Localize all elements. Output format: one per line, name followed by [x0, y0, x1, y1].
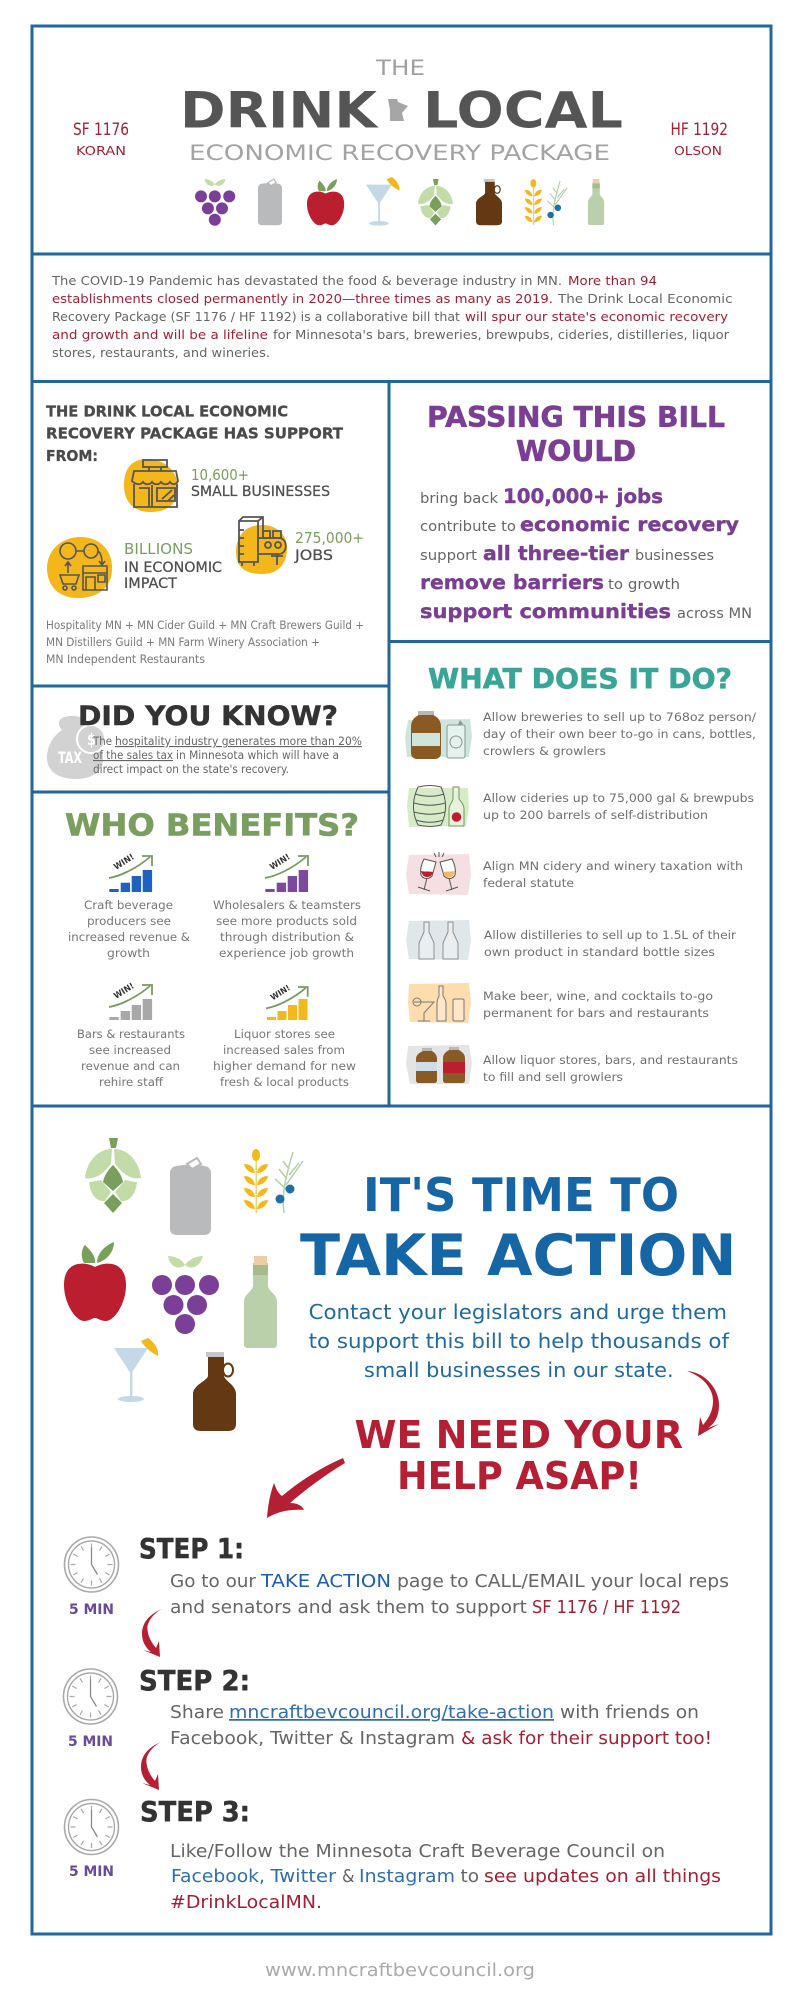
heading: WOULD: [516, 435, 636, 468]
line 2: [52, 292, 732, 306]
text: bars and restaurants: rehire staff: [99, 1075, 164, 1089]
instructions: #DrinkLocalMN.: [170, 1893, 322, 1913]
item: three-tier: businesses: [635, 548, 714, 564]
text: distilleries: Allow distilleries to sell up to 1.5L of their: [484, 928, 736, 942]
text: taxation: Align MN cidery and winery taxation with: [483, 859, 743, 873]
text: wholesalers: see more products sold: [216, 914, 357, 928]
icon: store: [124, 459, 178, 512]
stat: small businesses: 10,600+: [191, 466, 249, 484]
icon: minnesota map: [388, 99, 408, 121]
icon row: beverages: [195, 177, 604, 226]
icon: clock: [64, 1537, 118, 1592]
call to action text: Contact your legislators and urge them: [309, 1300, 727, 1324]
instructions: [170, 1572, 729, 1618]
panel: take action: [64, 1138, 736, 1518]
item: jobs: bring back: [420, 491, 499, 507]
line 2: The Drink Local Economic: [557, 292, 732, 306]
item: communities: support communities: [420, 600, 671, 623]
instructions: and senators and ask them to support: [170, 1598, 527, 1618]
arrow: step 1 to step 2: [142, 1609, 162, 1657]
supporters list: [46, 619, 364, 666]
heading: TAKE ACTION: [300, 1223, 736, 1289]
title: drink local: DRINK: [180, 81, 379, 139]
instructions: Twitter: [269, 1867, 337, 1887]
instructions: TAKE ACTION: [260, 1572, 391, 1592]
instructions: to: [460, 1867, 479, 1887]
instructions: with friends on: [560, 1703, 699, 1723]
text: liquor stores: fresh & local products: [220, 1075, 349, 1089]
panel: passing this bill: [420, 401, 752, 623]
icon: clock: [64, 1800, 118, 1854]
line 3: will spur our state's economic recovery: [465, 310, 728, 324]
subtitle: ECONOMIC RECOVERY PACKAGE: [189, 141, 610, 165]
item: recovery: economic recovery: [520, 513, 739, 536]
icon: tax bag: $: [87, 730, 96, 749]
text: bars and restaurants: Bars & restaurants: [77, 1027, 185, 1041]
chart icon: liquor stores: [266, 982, 308, 1020]
time label: 5 MIN: [69, 1864, 114, 1880]
icon: economic impact: [47, 537, 112, 598]
text: bars and restaurants: revenue and can: [81, 1059, 180, 1073]
item: three-tier: all three-tier: [483, 542, 629, 565]
title: drink local: [180, 81, 623, 139]
item: barriers: to growth: [608, 577, 680, 593]
text: producers: producers see: [87, 914, 171, 928]
step 3: [64, 1795, 721, 1913]
panel: did you know: [47, 701, 362, 779]
text: taxation: [483, 859, 743, 890]
panel: intro paragraph: [51, 274, 733, 360]
call to action text: [309, 1300, 730, 1382]
line 4: [52, 328, 730, 342]
line 2: establishments closed permanently in 2020—three times as many as 2019.: [52, 292, 553, 306]
icon: tax bag: [47, 716, 105, 779]
panel: header: [73, 56, 728, 226]
text: growlers: Allow liquor stores, bars, and restaurants: [483, 1053, 738, 1067]
item: communities: across MN: [677, 606, 752, 622]
icon: tax bag: TAX: [58, 748, 82, 767]
stat: billions: IN ECONOMIC: [124, 560, 222, 576]
fact text: of the sales tax: [93, 749, 173, 762]
supporters list: Hospitality MN + MN Cider Guild + MN Craft Brewers Guild +: [46, 619, 364, 632]
chart icon: bars and restaurants: [109, 981, 152, 1020]
text: growlers: to fill and sell growlers: [483, 1070, 623, 1084]
instructions: Go to our: [170, 1572, 257, 1592]
text: producers: growth: [107, 946, 150, 960]
heading: WHO BENEFITS?: [65, 809, 359, 844]
instructions: mncraftbevcouncil.org/take-action: [229, 1703, 554, 1723]
item: three-tier: [420, 542, 714, 565]
text: liquor stores: increased sales from: [223, 1043, 345, 1057]
instructions: Facebook, Twitter & Instagram: [170, 1729, 455, 1749]
text: breweries: crowlers & growlers: [483, 744, 606, 758]
item: recovery: [420, 513, 739, 536]
icon: conveyor jobs: [236, 517, 287, 574]
text: taxation: federal statute: [483, 876, 574, 890]
text: distilleries: own product in standard bottle sizes: [484, 945, 715, 959]
footer url: www.mncraftbevcouncil.org: [265, 1960, 535, 1981]
line 1: More than 94: [568, 274, 657, 288]
fact text: [92, 735, 362, 776]
chart icon: wholesalers: [265, 852, 308, 892]
text: growlers: [483, 1053, 738, 1084]
title: the: THE: [375, 56, 425, 80]
heading: THE DRINK LOCAL ECONOMIC: [46, 403, 288, 421]
item: barriers: remove barriers: [420, 571, 604, 594]
fact text: hospitality industry generates more than 20%: [115, 735, 362, 748]
heading: PASSING THIS BILL: [427, 401, 725, 434]
text: breweries: day of their own beer to-go in cans, bottles,: [483, 727, 756, 741]
house bill label: [670, 120, 728, 158]
text: producers: [68, 898, 190, 960]
instructions: & ask for their support too!: [461, 1729, 712, 1749]
heading: FROM:: [46, 447, 98, 465]
instructions: page to CALL/EMAIL your local reps: [397, 1572, 729, 1592]
fact text: The: [92, 735, 112, 748]
step 2: [64, 1664, 712, 1750]
panel: what does it do: [405, 662, 756, 1084]
fact text: in Minnesota which will have a: [176, 749, 339, 762]
urgent heading: WE NEED YOUR: [354, 1413, 683, 1457]
text: liquor stores: higher demand for new: [213, 1059, 356, 1073]
time label: 5 MIN: [69, 1602, 114, 1618]
time label: 5 MIN: [68, 1734, 113, 1750]
urgent heading: [354, 1413, 683, 1498]
text: bars and restaurants: [77, 1027, 185, 1089]
instructions: SF 1176 / HF 1192: [532, 1598, 681, 1618]
line 1: The COVID-19 Pandemic has devastated the food & beverage industry in MN.: [51, 274, 562, 288]
text: cideries: Allow cideries up to 75,000 gal & brewpubs: [483, 791, 754, 805]
item: recovery: contribute to: [420, 519, 516, 535]
item: three-tier: support: [420, 548, 477, 564]
panel: support: [46, 403, 364, 666]
call to action text: small businesses in our state.: [364, 1358, 674, 1382]
instructions: Instagram: [359, 1867, 455, 1887]
icon: barrel and cider bottle: [407, 786, 469, 827]
arrow: to steps: [267, 1458, 345, 1518]
stat: small businesses: SMALL BUSINESSES: [191, 484, 330, 500]
instructions: see updates on all things: [484, 1867, 721, 1887]
supporters list: MN Independent Restaurants: [46, 653, 205, 666]
text: liquor stores: [213, 1027, 356, 1089]
heading: [427, 401, 725, 468]
urgent heading: HELP ASAP!: [397, 1454, 642, 1498]
title: drink local: LOCAL: [423, 81, 623, 139]
supporters list: MN Distillers Guild + MN Farm Winery Association +: [46, 636, 320, 649]
item: jobs: [420, 485, 663, 508]
heading: IT'S TIME TO: [363, 1168, 679, 1222]
text: liquor stores: Liquor stores see: [234, 1027, 335, 1041]
stat: jobs: JOBS: [294, 548, 333, 564]
senate bill label: KORAN: [76, 143, 126, 158]
arrow: down to plea: [687, 1371, 719, 1436]
text: cideries: [483, 791, 754, 822]
call to action text: to support this bill to help thousands of: [309, 1329, 730, 1353]
item: barriers: [420, 571, 680, 594]
house bill label: HF 1192: [670, 120, 728, 139]
text: to-go: permanent for bars and restaurants: [483, 1006, 709, 1020]
heading: STEP 2:: [139, 1664, 250, 1697]
fact text: direct impact on the state's recovery.: [93, 763, 289, 776]
heading: STEP 1:: [139, 1532, 244, 1565]
icon cluster: beverages: [64, 1138, 303, 1431]
chart icon: producers: [109, 852, 152, 892]
stat: billions: IMPACT: [124, 576, 177, 592]
instructions: [170, 1703, 712, 1749]
text: producers: increased revenue &: [68, 930, 190, 944]
text: to-go: [483, 989, 713, 1020]
line 4: and growth and will be a lifeline: [52, 328, 268, 342]
text: cideries: up to 200 barrels of self-distribution: [483, 808, 708, 822]
text: producers: Craft beverage: [84, 898, 173, 912]
heading: [300, 1168, 736, 1289]
text: wholesalers: [213, 898, 361, 960]
heading: WHAT DOES IT DO?: [428, 662, 732, 695]
icon: cocktail, wine and can: [408, 983, 471, 1023]
text: wholesalers: through distribution &: [220, 930, 354, 944]
icon: brewery growler and can: [405, 711, 472, 759]
stat: jobs: 275,000+: [295, 529, 364, 547]
text: breweries: [483, 710, 756, 758]
text: wholesalers: Wholesalers & teamsters: [213, 898, 361, 912]
text: breweries: Allow breweries to sell up to 768oz person/: [483, 710, 756, 724]
heading: DID YOU KNOW?: [78, 701, 338, 732]
instructions: Share: [170, 1703, 224, 1723]
icon: clock: [64, 1669, 118, 1724]
panel: who benefits: [65, 809, 361, 1089]
instructions: [170, 1842, 721, 1913]
heading: [46, 403, 343, 465]
text: bars and restaurants: see increased: [89, 1043, 171, 1057]
line 3: [52, 310, 728, 324]
house bill label: OLSON: [674, 143, 722, 158]
senate bill label: SF 1176: [73, 120, 129, 139]
instructions: Facebook,: [171, 1867, 265, 1887]
icon: spirit bottles: [406, 920, 471, 960]
step 1: [64, 1532, 729, 1618]
line 3: Recovery Package (SF 1176 / HF 1192) is a collaborative bill that: [52, 310, 460, 324]
stat: billions: BILLIONS: [124, 540, 193, 558]
text: to-go: Make beer, wine, and cocktails to-go: [483, 989, 713, 1003]
line 4: for Minnesota's bars, breweries, brewpubs, cideries, distilleries, liquor: [273, 328, 730, 342]
instructions: Like/Follow the Minnesota Craft Beverage Council on: [170, 1842, 665, 1862]
line 5: stores, restaurants, and wineries.: [52, 346, 270, 360]
icon: two growlers: [406, 1045, 472, 1084]
heading: RECOVERY PACKAGE HAS SUPPORT: [46, 425, 343, 443]
item: jobs: 100,000+ jobs: [503, 485, 663, 508]
text: wholesalers: experience job growth: [219, 946, 354, 960]
text: distilleries: [484, 928, 736, 959]
stat: small businesses: [191, 466, 330, 500]
instructions: &: [342, 1867, 355, 1887]
heading: STEP 3:: [140, 1795, 250, 1828]
icon: clinking wine glasses: [406, 852, 471, 895]
senate bill label: [73, 120, 129, 158]
stat: billions: [124, 540, 222, 592]
stat: jobs: [294, 529, 364, 564]
arrow: step 2 to step 3: [141, 1742, 161, 1790]
